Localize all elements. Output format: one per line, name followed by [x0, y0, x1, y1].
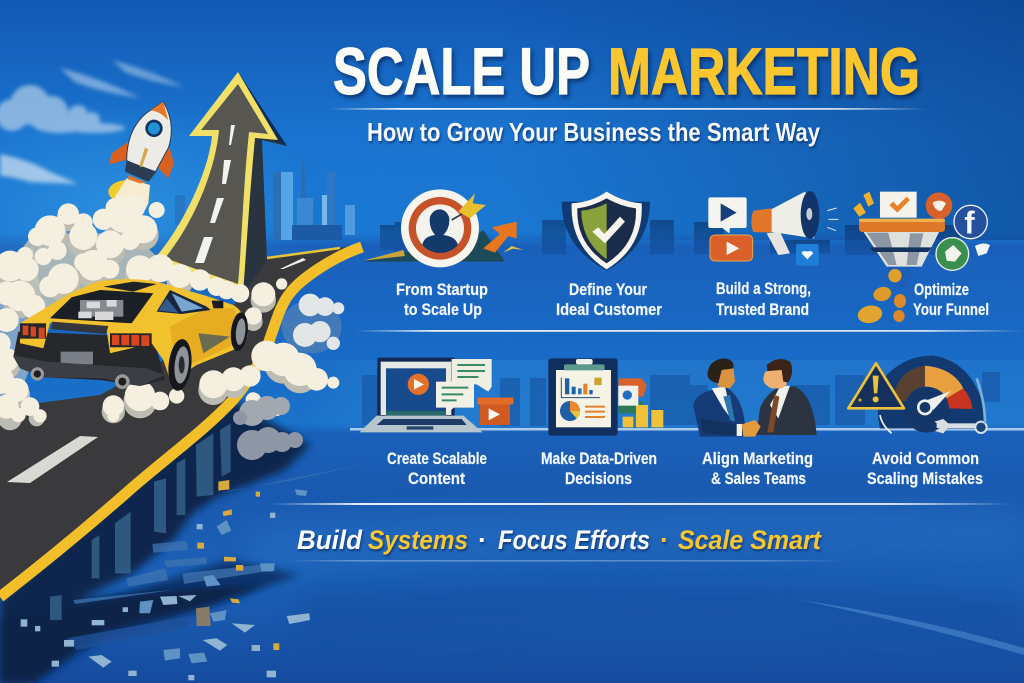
icon: target with person [363, 189, 523, 267]
wall shadow [0, 560, 300, 683]
label: Build a Strong, [716, 280, 811, 298]
road surface [0, 245, 360, 597]
debris [21, 463, 367, 680]
label [387, 450, 487, 488]
smoke clouds [0, 195, 344, 430]
row divider [355, 330, 1024, 332]
label: Create Scalable [387, 450, 487, 468]
arrow road [155, 72, 287, 295]
label [702, 450, 813, 488]
far road edge [267, 248, 340, 258]
label: Avoid Common [872, 450, 979, 468]
lower road [0, 245, 362, 683]
icon: clipboard with charts [548, 358, 663, 436]
city skyline [175, 155, 355, 240]
title rule [330, 108, 926, 110]
item: make data-driven decisions [541, 358, 663, 488]
item: optimize your funnel [853, 192, 990, 325]
label [913, 281, 989, 319]
item: define your ideal customer [556, 192, 663, 319]
tagline [297, 525, 822, 555]
lower rule [270, 503, 1010, 505]
item: build a strong, trusted brand [708, 191, 838, 319]
icon: funnel with coins and social: f [964, 206, 975, 241]
car [13, 279, 250, 392]
item: align marketing and sales teams [693, 358, 817, 488]
label: Scaling Mistakes [867, 470, 983, 488]
label [541, 450, 657, 488]
label [867, 450, 983, 488]
label [716, 280, 811, 319]
label: Define Your [569, 281, 647, 299]
row 2 skyline and rule [350, 372, 1024, 430]
icon: laptop with bubbles [359, 358, 513, 432]
label: to Scale Up [404, 301, 482, 319]
icon: shield [562, 192, 650, 271]
label: From Startup [396, 281, 488, 299]
road edge line [0, 247, 362, 597]
icon: warning and gauge [848, 356, 987, 433]
tagline: · [660, 525, 669, 555]
label [556, 281, 663, 319]
label: Make Data-Driven [541, 450, 657, 468]
tagline: Scale Smart [678, 525, 822, 555]
icon: handshake [693, 358, 817, 437]
lane dash [7, 436, 98, 483]
subtitle: How to Grow Your Business the Smart Way [367, 117, 820, 147]
title [333, 34, 920, 108]
under-road wall [0, 400, 310, 683]
label: Your Funnel [913, 301, 989, 319]
tagline: Systems [368, 525, 468, 555]
row 1 silhouettes [380, 220, 960, 255]
label: Ideal Customer [556, 301, 663, 319]
label: Trusted Brand [716, 301, 809, 319]
title: MARKETING [608, 34, 920, 108]
tagline: Focus Efforts [498, 525, 650, 555]
grey low clouds [233, 396, 303, 460]
tagline: · [478, 525, 487, 555]
label [396, 281, 488, 319]
title: SCALE UP [333, 34, 590, 108]
sky clouds [0, 60, 184, 184]
item: create scalable content [359, 358, 513, 488]
label: Align Marketing [702, 450, 813, 468]
item: avoid common scaling mistakes [848, 356, 987, 488]
tagline: Build [297, 525, 362, 555]
label: Decisions [565, 470, 632, 488]
item: from startup to scale up [363, 189, 523, 319]
tagline underline [285, 560, 845, 562]
label: Optimize [914, 281, 969, 299]
label: & Sales Teams [711, 470, 806, 488]
lane dashes [195, 125, 235, 263]
rocket [108, 102, 174, 220]
label: Content [408, 470, 465, 488]
icon: megaphone and media [708, 191, 838, 266]
